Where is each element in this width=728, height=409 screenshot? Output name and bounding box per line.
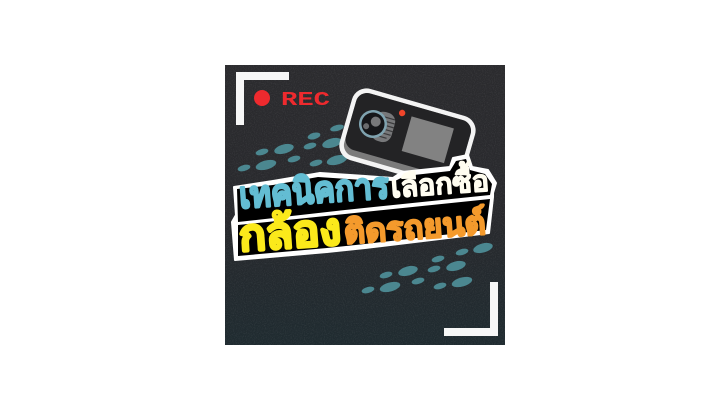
title: second line bbox=[237, 195, 487, 261]
icon: dash camera bbox=[336, 85, 479, 191]
title word: ติดรถยนต์: ติดรถยนต์ bbox=[343, 204, 487, 251]
title backdrop: second line black bbox=[238, 199, 490, 256]
panel: dark background bbox=[225, 65, 505, 345]
camera indicator light bbox=[398, 109, 406, 117]
frame corner: bottom right bbox=[444, 282, 498, 336]
frame corner: top left bbox=[236, 72, 289, 125]
REC label: REC bbox=[281, 89, 330, 111]
title backdrop: white outline bbox=[232, 155, 496, 260]
camera lens bbox=[356, 107, 390, 141]
title word: เทคนิคการ: เทคนิคการ bbox=[238, 165, 391, 216]
title: first line bbox=[238, 158, 490, 216]
speed marks: top group bbox=[237, 123, 348, 173]
speed marks: bottom group bbox=[361, 241, 494, 295]
camera screen bbox=[402, 116, 454, 163]
title word: เลือกซื้อ: เลือกซื้อ bbox=[389, 159, 490, 204]
icon: record dot bbox=[254, 90, 270, 106]
title word: กล้อง: กล้อง bbox=[237, 205, 342, 261]
camera ribs bbox=[369, 110, 397, 144]
title backdrop: first line black bbox=[237, 159, 492, 222]
